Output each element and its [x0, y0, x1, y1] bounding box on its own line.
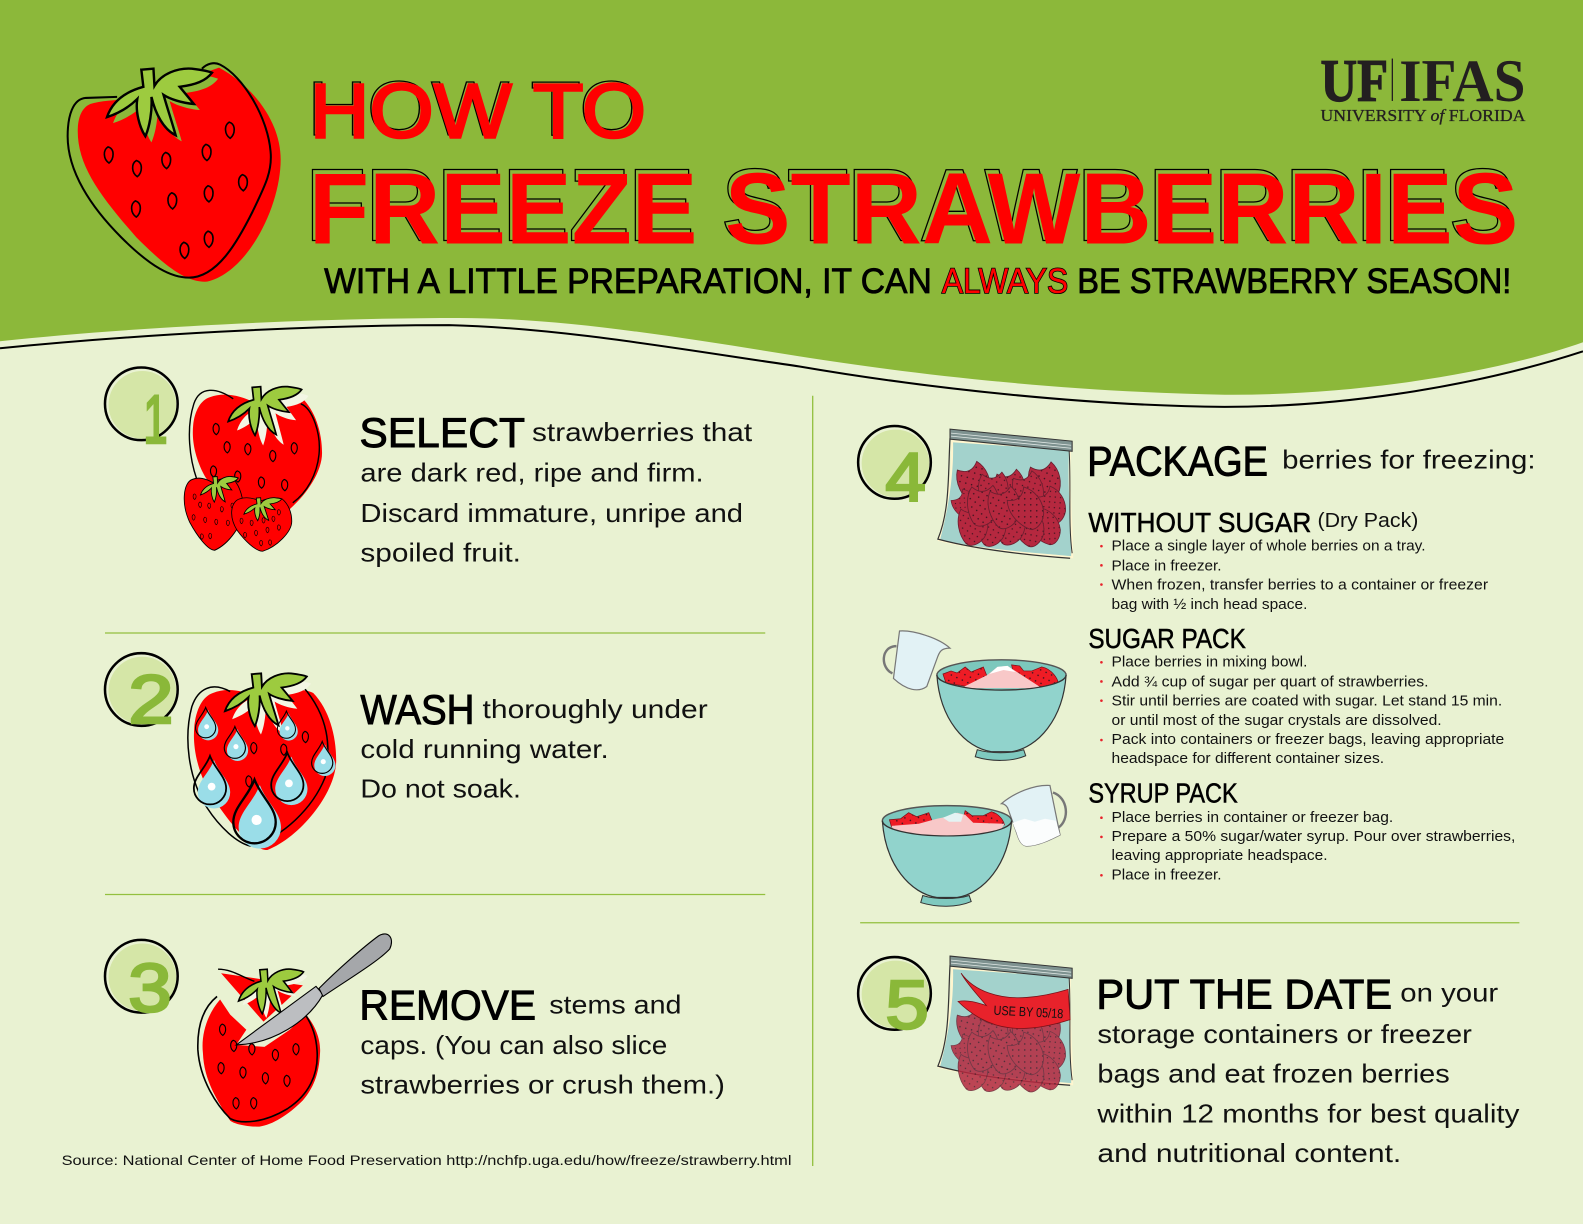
step 1 number [105, 367, 178, 458]
step 5 text: storage containers or freezer [1097, 1019, 1472, 1049]
syrup pack section [1088, 778, 1515, 883]
step 3 number: 3 [128, 950, 172, 1027]
sugar pack section: Stir until berries are coated with sugar. Let stand 15 min. [1112, 694, 1502, 710]
header banner [0, 0, 1583, 395]
sugar pack section: headspace for different container sizes. [1112, 751, 1384, 767]
step 3 text: caps. (You can also slice [360, 1030, 667, 1060]
without sugar section: Place a single layer of whole berries on a tray. [1112, 539, 1426, 555]
step 3 text [359, 983, 725, 1099]
step 2 number: 2 [128, 661, 174, 738]
icon: bowl and jug with syrup [882, 785, 1066, 906]
step 1 text: spoiled fruit. [360, 537, 521, 567]
step 4 heading: PACKAGE [1087, 439, 1268, 485]
step 2 text [360, 687, 708, 804]
step 4 number [858, 426, 931, 516]
without sugar section: (Dry Pack) [1317, 510, 1418, 532]
step 5 text: bags and eat frozen berries [1097, 1058, 1450, 1088]
without sugar section: WITHOUT SUGAR [1088, 507, 1311, 538]
sugar pack section [1088, 623, 1504, 767]
icon: jug and bowl with sugar [884, 631, 1066, 760]
step 5 text [1096, 972, 1520, 1168]
step 1 text: Discard immature, unripe and [360, 498, 743, 528]
icon: large strawberry [68, 63, 281, 282]
step 4 heading [1087, 439, 1536, 485]
sugar pack section: Add ¾ cup of sugar per quart of strawberries. [1112, 675, 1429, 691]
step 5 text: PUT THE DATE [1096, 972, 1392, 1018]
icon: freezer bag [938, 429, 1072, 558]
icon: three strawberries [184, 387, 322, 551]
icon: labelled freezer bag: USE BY 05/18 [993, 1003, 1064, 1021]
step 3 number [105, 940, 178, 1027]
subtitle [324, 262, 1511, 301]
title: how to: HOW TO [307, 67, 644, 152]
syrup pack section: Place berries in container or freezer bag. [1112, 810, 1393, 826]
wavy header line [0, 325, 1583, 407]
step 3 text: strawberries or crush them.) [360, 1069, 725, 1099]
without sugar section: When frozen, transfer berries to a container or freezer [1112, 578, 1488, 594]
step 3 text: REMOVE [359, 983, 536, 1029]
logo: UF IFAS: UF [1321, 48, 1388, 115]
without sugar section [1088, 507, 1488, 613]
logo: UF IFAS: IFAS [1399, 48, 1525, 115]
title: freeze strawberries: FREEZE STRAWBERRIES [306, 147, 1515, 262]
logo: UF IFAS [1321, 48, 1526, 125]
step 1 text: SELECT [359, 410, 525, 456]
step 1 text: are dark red, ripe and firm. [360, 458, 704, 488]
step 2 text: cold running water. [360, 734, 609, 764]
step 2 text: Do not soak. [360, 774, 521, 804]
step 5 text: on your [1400, 977, 1498, 1007]
sugar pack section: Pack into containers or freezer bags, leaving appropriate [1112, 732, 1504, 748]
subtitle: ALWAYS [942, 262, 1068, 301]
step 4 number: 4 [885, 439, 926, 516]
sugar pack section: SUGAR PACK [1088, 623, 1246, 654]
syrup pack section: leaving appropriate headspace. [1112, 848, 1328, 864]
icon: strawberry with knife [198, 934, 392, 1127]
step 2 text: thoroughly under [483, 694, 708, 724]
syrup pack section: Place in freezer. [1112, 867, 1222, 883]
source note: Source: National Center of Home Food Preservation http://nchfp.uga.edu/how/freeze/strawberry.html [62, 1153, 792, 1168]
subtitle: WITH A LITTLE PREPARATION, IT CAN [324, 262, 932, 301]
step 2 text: WASH [360, 687, 474, 733]
title: how to: HOW TO [310, 69, 646, 154]
logo: UF IFAS: UNIVERSITY of FLORIDA [1321, 106, 1526, 125]
subtitle: BE STRAWBERRY SEASON! [1077, 262, 1511, 301]
step 5 text: and nutritional content. [1097, 1138, 1401, 1168]
sugar pack section: or until most of the sugar crystals are dissolved. [1112, 713, 1442, 729]
step 4 heading: berries for freezing: [1282, 444, 1536, 474]
icon: labelled freezer bag [938, 956, 1072, 1096]
step 1 text: strawberries that [532, 417, 753, 447]
step 5 text: within 12 months for best quality [1096, 1099, 1520, 1129]
icon: washed strawberry [188, 673, 336, 850]
sugar pack section: Place berries in mixing bowl. [1112, 654, 1307, 670]
without sugar section: Place in freezer. [1112, 558, 1222, 574]
title: freeze strawberries: FREEZE STRAWBERRIES [309, 153, 1518, 265]
step 5 number: 5 [885, 967, 929, 1044]
step 5 number [858, 957, 931, 1044]
step 1 number: 1 [143, 381, 168, 458]
without sugar section: bag with ½ inch head space. [1112, 597, 1307, 613]
syrup pack section: SYRUP PACK [1088, 778, 1238, 809]
step 2 number [105, 653, 178, 738]
step 3 text: stems and [549, 990, 681, 1020]
step 1 text [359, 410, 753, 567]
syrup pack section: Prepare a 50% sugar/water syrup. Pour over strawberries, [1112, 829, 1515, 845]
